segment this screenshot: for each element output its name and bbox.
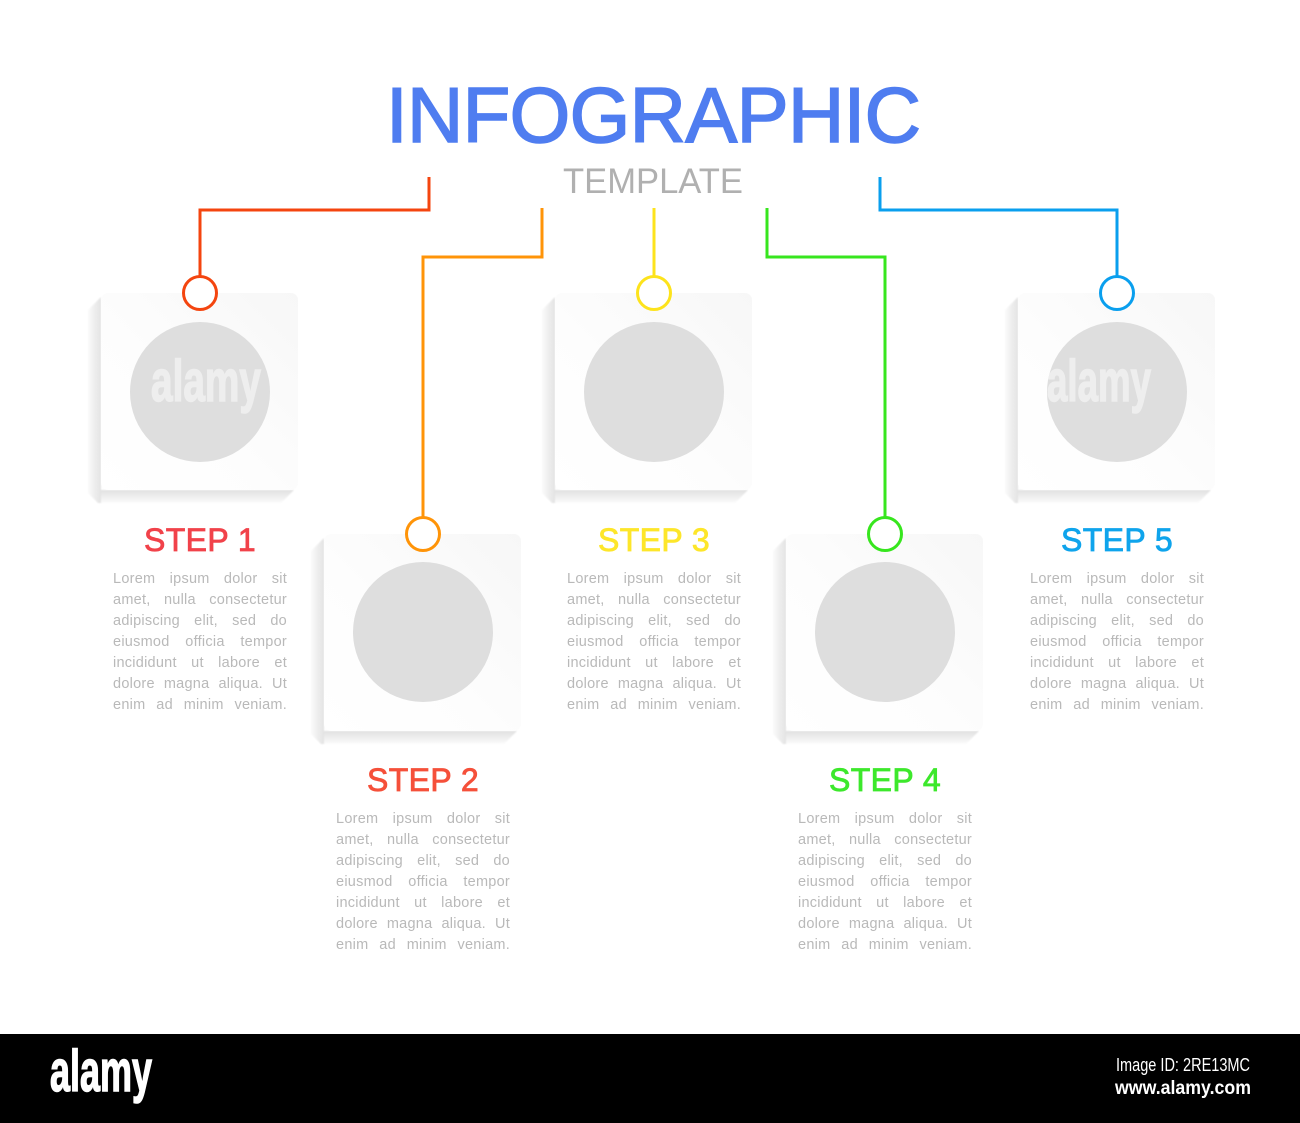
step 3 body: amet, nulla consectetur <box>567 592 741 608</box>
image id: Image ID: 2RE13MC <box>1116 1055 1250 1075</box>
footer logo: alamy <box>50 1039 152 1104</box>
step 5 heading: STEP 5 <box>1061 522 1173 558</box>
step 2 heading: STEP 2 <box>367 762 479 798</box>
step 3 body: adipiscing elit, sed do <box>567 612 741 628</box>
connector: step 1 <box>184 177 429 310</box>
step 3 body: dolore magna aliqua. Ut <box>567 676 741 692</box>
step 5 body: amet, nulla consectetur <box>1030 592 1204 608</box>
connector: step 2 <box>406 208 542 550</box>
step 5 body: adipiscing elit, sed do <box>1030 612 1204 628</box>
step 2 body <box>336 810 510 952</box>
step 2 body: dolore magna aliqua. Ut <box>336 916 510 932</box>
step 2 text block <box>336 762 510 952</box>
step 1 body: enim ad minim veniam. <box>113 696 287 712</box>
watermark: right circle: alamy <box>1047 349 1151 414</box>
watermark: left circle: alamy <box>151 349 261 414</box>
step 1 body: adipiscing elit, sed do <box>113 612 287 628</box>
step 4 heading: STEP 4 <box>829 762 941 798</box>
card: step 1 <box>88 293 298 503</box>
step 1 body: amet, nulla consectetur <box>113 592 287 608</box>
step 5 body: Lorem ipsum dolor sit <box>1030 570 1204 586</box>
step 4 body: Lorem ipsum dolor sit <box>798 810 972 826</box>
step 2 body: eiusmod officia tempor <box>336 874 510 890</box>
step 2 body: incididunt ut labore et <box>336 894 510 910</box>
step 3 body: eiusmod officia tempor <box>567 634 741 650</box>
card: step 3 <box>542 293 752 503</box>
card: step 2 <box>311 534 521 744</box>
website: www.alamy.com <box>1114 1078 1251 1099</box>
step 1 body: Lorem ipsum dolor sit <box>113 570 287 586</box>
step 5 body: dolore magna aliqua. Ut <box>1030 676 1204 692</box>
step 3 heading: STEP 3 <box>598 522 710 558</box>
step 1 text block <box>113 522 287 712</box>
card: step 4 <box>773 534 983 744</box>
step 2 body: Lorem ipsum dolor sit <box>336 810 510 826</box>
step 2 body: amet, nulla consectetur <box>336 832 510 848</box>
step 4 body: amet, nulla consectetur <box>798 832 972 848</box>
step 3 body: Lorem ipsum dolor sit <box>567 570 741 586</box>
card: step 5 <box>1005 293 1215 503</box>
step 5 body: eiusmod officia tempor <box>1030 634 1204 650</box>
step 1 body: incididunt ut labore et <box>113 654 287 670</box>
step 4 text block <box>798 762 972 952</box>
step 5 body: incididunt ut labore et <box>1030 654 1204 670</box>
step 1 body: eiusmod officia tempor <box>113 634 287 650</box>
step 4 body <box>798 810 972 952</box>
step 3 body: enim ad minim veniam. <box>567 696 741 712</box>
step 4 body: incididunt ut labore et <box>798 894 972 910</box>
step 2 body: enim ad minim veniam. <box>336 936 510 952</box>
step 3 text block <box>567 522 741 712</box>
step 4 body: eiusmod officia tempor <box>798 874 972 890</box>
step 4 body: dolore magna aliqua. Ut <box>798 916 972 932</box>
step 4 body: adipiscing elit, sed do <box>798 852 972 868</box>
step 1 heading: STEP 1 <box>144 522 256 558</box>
connector: step 3 <box>638 208 670 310</box>
connector: step 5 <box>880 177 1134 310</box>
step 1 body <box>113 570 287 712</box>
step 3 body <box>567 570 741 712</box>
subtitle: TEMPLATE <box>563 162 743 201</box>
step 3 body: incididunt ut labore et <box>567 654 741 670</box>
step 2 body: adipiscing elit, sed do <box>336 852 510 868</box>
step 1 body: dolore magna aliqua. Ut <box>113 676 287 692</box>
step 5 body <box>1030 570 1204 712</box>
title: INFOGRAPHIC <box>386 71 921 159</box>
footer bar <box>0 1034 1300 1123</box>
step 5 body: enim ad minim veniam. <box>1030 696 1204 712</box>
connector: step 4 <box>767 208 902 550</box>
step 5 text block <box>1030 522 1204 712</box>
step 4 body: enim ad minim veniam. <box>798 936 972 952</box>
